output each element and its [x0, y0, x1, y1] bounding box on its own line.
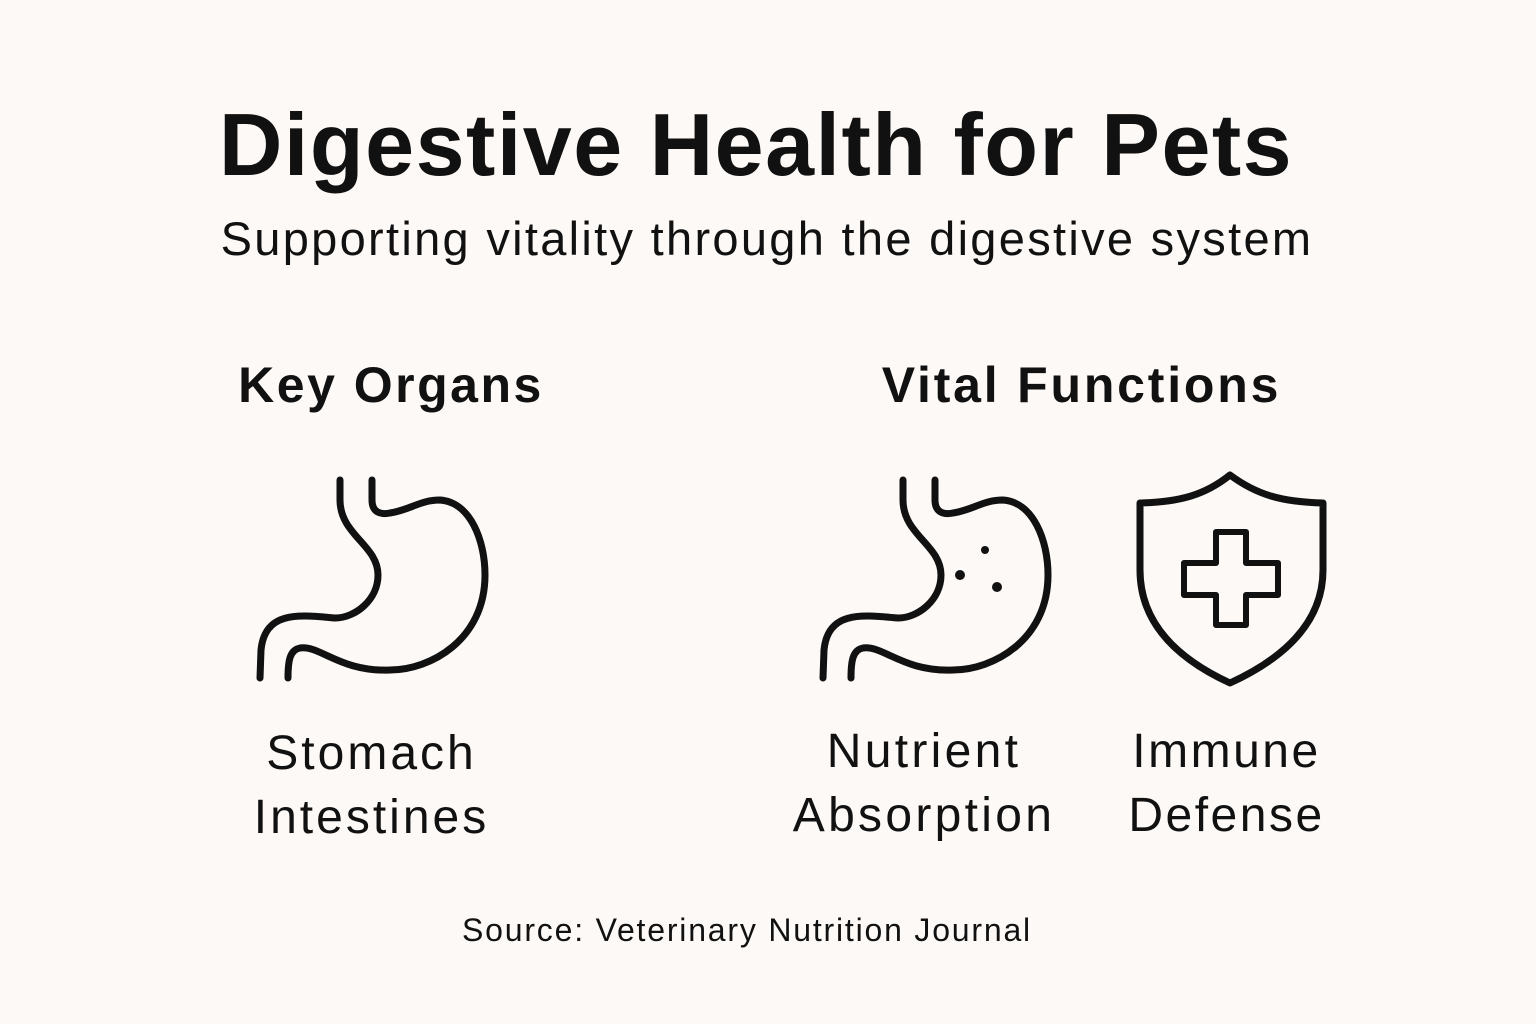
- label: immune defense: [1128, 725, 1325, 842]
- heading: vital functions: Vital Functions: [882, 357, 1281, 413]
- label: nutrient absorption: Nutrient: [827, 725, 1021, 778]
- title: Digestive Health for Pets: [219, 95, 1293, 194]
- heading: key organs: Key Organs: [238, 357, 544, 413]
- label: immune defense: Defense: [1128, 789, 1325, 842]
- label: stomach intestines: [254, 727, 489, 844]
- subtitle: Supporting vitality through the digestive system: [221, 212, 1313, 265]
- label: nutrient absorption: [792, 725, 1055, 842]
- label: stomach intestines: Stomach: [266, 727, 477, 780]
- label: nutrient absorption: Absorption: [793, 789, 1055, 842]
- icon: stomach with nutrients: [823, 480, 1048, 678]
- source: Source: Veterinary Nutrition Journal: [462, 912, 1032, 948]
- label: immune defense: Immune: [1132, 725, 1321, 778]
- icon: stomach: [260, 480, 485, 678]
- label: stomach intestines: Intestines: [254, 791, 489, 844]
- icon: shield with cross: [1140, 475, 1323, 683]
